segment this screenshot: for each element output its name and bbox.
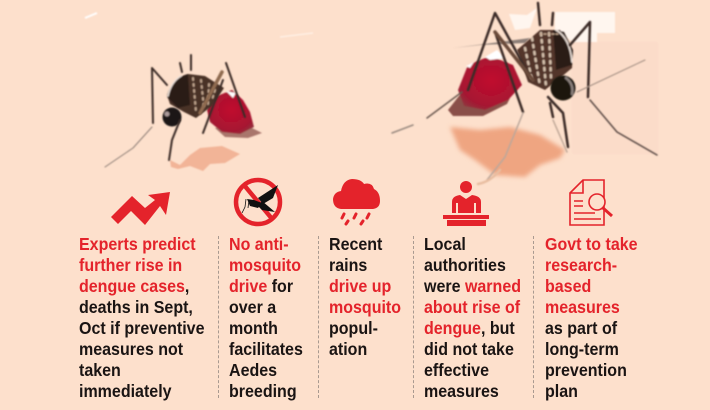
blood-filled abdomen right [448, 50, 522, 116]
text: column 5: Govt to take [545, 234, 638, 254]
text: column 2: No anti- [229, 234, 289, 254]
text: column 4: were warned [424, 276, 521, 296]
text: column 5: plan [545, 380, 578, 400]
text: column 5: measures [545, 296, 620, 316]
text: column 1: immediately [79, 380, 172, 400]
wing right [453, 38, 530, 48]
legs left [105, 55, 245, 167]
text: column 3: popul- [329, 318, 378, 338]
text: column 1: Oct if preventive [79, 318, 204, 338]
text: column 4: about rise of [424, 296, 520, 316]
text: column 1: dengue cases, [79, 276, 189, 296]
text: column 1: taken [79, 360, 121, 380]
text: column 4: dengue, but [424, 318, 515, 338]
text: column 5: research- [545, 254, 617, 274]
head right [550, 76, 576, 100]
text: column 4 [424, 234, 521, 400]
text: column 1 [79, 234, 204, 400]
text: column 3: rains [329, 254, 367, 274]
text: column 2: drive for [229, 276, 293, 296]
background skin patch [85, 8, 658, 154]
text: column 3 [329, 234, 401, 358]
head left [162, 108, 182, 126]
right mosquito [392, 3, 657, 184]
thorax right [517, 30, 573, 90]
legs right [392, 3, 657, 184]
icon: no mosquito [236, 180, 280, 224]
text: column 1: Experts predict [79, 234, 196, 254]
text: column 4: Local [424, 234, 466, 254]
icon: document with magnifier [570, 180, 612, 225]
text: column 4: authorities [424, 254, 506, 274]
icon: rising arrow [111, 192, 170, 225]
text: column 5 [545, 234, 638, 400]
text: column 2: Aedes [229, 360, 277, 380]
blood spot right [450, 127, 565, 177]
left mosquito [105, 55, 262, 171]
text: column 4: did not take [424, 338, 514, 358]
text: column 3: mosquito [329, 296, 401, 316]
text: column 2: mosquito [229, 254, 301, 274]
icon: rain cloud [333, 179, 380, 224]
text: column 1: further rise in [79, 254, 182, 274]
icon: official at podium [443, 181, 489, 226]
text: column 2: facilitates [229, 338, 303, 358]
text: column 3: Recent [329, 234, 382, 254]
text: column 2: month [229, 318, 278, 338]
text: column 5: based [545, 276, 591, 296]
blood-filled abdomen left [207, 90, 262, 138]
text: column 2: over a [229, 296, 276, 316]
text: column 3: drive up [329, 276, 391, 296]
text: column 2: breeding [229, 380, 297, 400]
text: column 1: deaths in Sept, [79, 296, 193, 316]
text: column 2 [229, 234, 303, 400]
text: column 4: measures [424, 380, 499, 400]
text: column 3: ation [329, 338, 367, 358]
text: column 5: prevention [545, 360, 627, 380]
text: column 5: long-term [545, 338, 619, 358]
text: column 5: as part of [545, 318, 617, 338]
blood spot left [170, 146, 240, 171]
thorax left [167, 74, 224, 118]
text: column 4: effective [424, 360, 489, 380]
text: column 1: measures not [79, 338, 183, 358]
